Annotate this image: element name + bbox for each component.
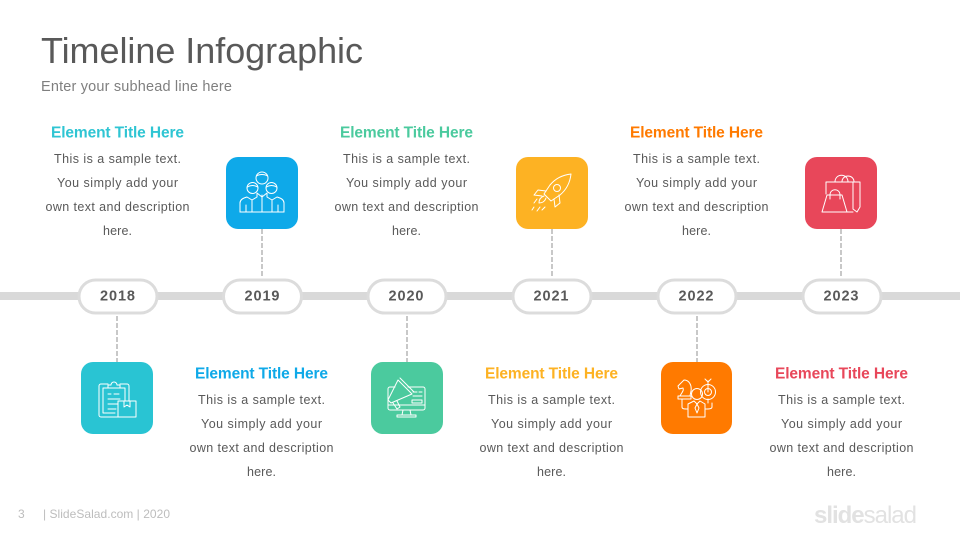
panel: 2021 text block: here. bbox=[537, 465, 566, 479]
panel: 2022 text block: here. bbox=[682, 224, 711, 238]
panel: 2023 text block bbox=[770, 366, 914, 479]
panel: 2019 text block: This is a sample text. bbox=[198, 393, 325, 407]
panel: 2021 text block: This is a sample text. bbox=[488, 393, 615, 407]
panel: 2021 text block bbox=[480, 366, 624, 479]
year pill 2020 bbox=[368, 280, 446, 313]
panel: 2020 text block: Element Title Here bbox=[340, 124, 473, 142]
panel: 2019 text block: Element Title Here bbox=[195, 366, 328, 382]
connector 2021 bbox=[551, 229, 553, 278]
panel: 2023 text block: own text and description bbox=[770, 441, 914, 455]
panel: 2018 text block: here. bbox=[103, 224, 132, 238]
timeline bar bbox=[0, 292, 960, 300]
panel: 2019 text block bbox=[190, 366, 334, 479]
connector 2018 bbox=[116, 316, 118, 362]
panel: 2020 text block: You simply add your bbox=[346, 176, 467, 190]
panel: 2018 text block: own text and description bbox=[46, 200, 190, 214]
year pill 2023: 2023 bbox=[824, 288, 858, 304]
icon: chess strategy and target bbox=[661, 362, 732, 434]
year pill 2023 bbox=[803, 280, 881, 313]
panel: 2022 text block: This is a sample text. bbox=[633, 152, 760, 166]
panel: 2018 text block: You simply add your bbox=[57, 176, 178, 190]
panel: 2018 text block: This is a sample text. bbox=[54, 152, 181, 166]
year pill 2022 bbox=[658, 280, 736, 313]
year pill 2019: 2019 bbox=[244, 288, 280, 304]
icon: monitor with megaphone bbox=[371, 362, 443, 434]
panel: 2021 text block: You simply add your bbox=[491, 417, 612, 431]
year pill 2018: 2018 bbox=[100, 288, 135, 304]
panel: 2020 text block bbox=[334, 124, 479, 238]
panel: 2020 text block: own text and description bbox=[334, 200, 479, 214]
year pill 2022: 2022 bbox=[678, 288, 714, 304]
connector 2023 bbox=[840, 229, 842, 278]
icon: clipboard and box bbox=[81, 362, 153, 434]
panel: 2022 text block: You simply add your bbox=[636, 176, 757, 190]
panel: 2021 text block: own text and description bbox=[480, 441, 624, 455]
panel: 2020 text block: This is a sample text. bbox=[343, 152, 470, 166]
panel: 2022 text block: own text and description bbox=[624, 200, 769, 214]
logo: slidesalad: slidesalad bbox=[814, 502, 917, 529]
subhead: Enter your subhead line here bbox=[41, 79, 232, 95]
year pill 2021 bbox=[513, 280, 591, 313]
panel: 2023 text block: You simply add your bbox=[781, 417, 902, 431]
year pill 2019 bbox=[224, 280, 302, 313]
panel: 2023 text block: Element Title Here bbox=[775, 366, 908, 382]
panel: 2022 text block: Element Title Here bbox=[630, 124, 763, 142]
panel: 2019 text block: own text and description bbox=[190, 441, 334, 455]
page number: 3 bbox=[18, 507, 25, 521]
panel: 2022 text block bbox=[624, 124, 769, 238]
connector 2020 bbox=[406, 316, 408, 362]
connector 2022 bbox=[696, 316, 698, 362]
panel: 2021 text block: Element Title Here bbox=[485, 366, 618, 382]
year pill 2020: 2020 bbox=[388, 288, 424, 304]
icon: shopping bags bbox=[805, 157, 877, 229]
panel: 2023 text block: This is a sample text. bbox=[778, 393, 905, 407]
panel: 2019 text block: here. bbox=[247, 465, 276, 479]
panel: 2019 text block: You simply add your bbox=[201, 417, 322, 431]
connector 2019 bbox=[261, 229, 263, 278]
year pill 2018 bbox=[79, 280, 157, 313]
icon: rocket bbox=[516, 157, 588, 229]
panel: 2018 text block: Element Title Here bbox=[51, 124, 184, 142]
icon: business team bbox=[226, 157, 298, 229]
panel: 2023 text block: here. bbox=[827, 465, 856, 479]
panel: 2020 text block: here. bbox=[392, 224, 421, 238]
title: Timeline Infographic bbox=[41, 30, 363, 71]
year pill 2021: 2021 bbox=[534, 288, 568, 304]
panel: 2018 text block bbox=[46, 124, 190, 238]
footer text: | SlideSalad.com | 2020 bbox=[43, 507, 170, 521]
